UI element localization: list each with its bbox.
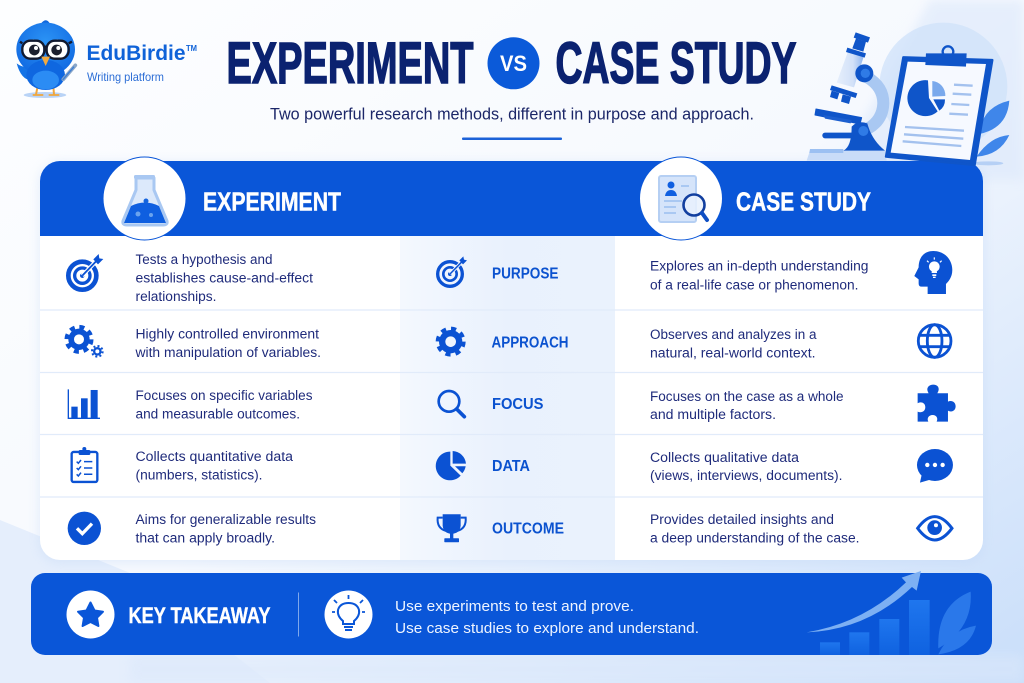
trademark: TM [186, 44, 197, 53]
icon: lightbulb badge [324, 590, 372, 638]
row: case study data [650, 449, 953, 483]
icon: head with bulb [914, 251, 952, 294]
growth chart illustration [807, 571, 976, 655]
row: experiment focus [68, 388, 313, 422]
icon: puzzle piece [918, 385, 956, 422]
illustration: microscope and clipboard [807, 23, 1009, 165]
icon: checklist clipboard [72, 447, 97, 482]
leaves [977, 101, 1009, 157]
comparison panel [38, 157, 985, 564]
row: case study approach [650, 325, 951, 360]
header label: case study: CASE STUDY [736, 186, 871, 216]
icon: star badge [66, 590, 114, 638]
icon: bird mascot [16, 20, 75, 98]
category: outcome: OUTCOME [492, 520, 564, 538]
icon: gears [67, 327, 103, 357]
row: experiment purpose: Tests a hypothesis and [136, 252, 272, 267]
row: experiment focus: and measurable outcomes. [136, 406, 300, 422]
row: experiment approach: Highly controlled environment [136, 326, 319, 342]
row: experiment data: (numbers, statistics). [136, 468, 262, 482]
key takeaway banner [31, 571, 992, 655]
icon: check circle [68, 512, 101, 545]
category: approach [438, 329, 568, 354]
header: experiment [103, 157, 341, 240]
header: case study [640, 157, 871, 240]
row: case study focus: and multiple factors. [650, 407, 776, 422]
icon: target [438, 256, 467, 286]
title: case study: CASE STUDY [556, 31, 796, 96]
row: experiment approach: with manipulation of variables. [134, 345, 321, 360]
row: experiment focus: Focuses on specific variables [136, 388, 313, 403]
column: categories [436, 256, 568, 542]
vs badge: VS [500, 51, 527, 76]
row: case study approach: Observes and analyzes in a [650, 327, 817, 342]
row: experiment purpose: relationships. [136, 289, 216, 304]
row: case study outcome: Provides detailed insights and [650, 512, 834, 527]
vs badge [488, 37, 540, 89]
row: case study focus: Focuses on the case as a whole [650, 389, 844, 404]
logo tagline: Writing platform [87, 70, 164, 84]
icon: magnifier [439, 391, 464, 417]
row: case study purpose [650, 251, 952, 294]
takeaway text: Use case studies to explore and understand. [395, 621, 699, 637]
row: case study data: Collects qualitative data [650, 450, 800, 465]
row: case study data: (views, interviews, documents). [650, 468, 842, 483]
icon: pie chart [436, 451, 466, 480]
row: experiment approach [67, 326, 321, 360]
takeaway text: Use experiments to test and prove. [395, 599, 634, 615]
header label: experiment: EXPERIMENT [203, 186, 341, 216]
icon: trophy [438, 514, 466, 542]
row: case study approach: natural, real-world context. [650, 346, 816, 360]
key takeaway label: KEY TAKEAWAY [128, 603, 271, 628]
column: experiment points [67, 252, 321, 546]
row: case study outcome: a deep understanding of the case. [650, 530, 860, 546]
case study badge: document and magnifier [640, 157, 722, 240]
icon: gear [438, 329, 463, 354]
category: data [436, 451, 530, 480]
row: experiment data [72, 447, 294, 482]
row: case study purpose: of a real-life case or phenomenon. [650, 278, 858, 292]
category: focus [439, 391, 544, 417]
icon: eye [918, 517, 952, 540]
center column background [400, 236, 615, 560]
subtitle: Two powerful research methods, different in purpose and approach. [270, 106, 754, 124]
icon: globe [918, 325, 951, 357]
table header [40, 161, 983, 236]
category: purpose [438, 256, 559, 286]
row: experiment outcome [68, 512, 316, 546]
column: case study points [650, 251, 956, 546]
icon: bar chart [68, 389, 100, 418]
row: experiment data: Collects quantitative data [136, 449, 294, 464]
category: approach: APPROACH [492, 334, 568, 352]
icon: speech bubble [917, 449, 953, 483]
category: outcome [438, 514, 564, 542]
microscope [807, 32, 887, 161]
logo: EduBirdie [16, 20, 197, 98]
clipboard [886, 46, 992, 165]
row: case study outcome [650, 512, 952, 546]
row: experiment purpose [68, 252, 313, 304]
row: case study focus [650, 385, 956, 422]
experiment badge: flask [103, 157, 186, 240]
row: experiment purpose: establishes cause-and-effect [136, 270, 313, 286]
title [226, 31, 796, 96]
row: experiment outcome: that can apply broadly. [136, 530, 275, 546]
takeaway text [395, 599, 699, 637]
category: purpose: PURPOSE [492, 266, 559, 282]
icon: target [68, 254, 103, 290]
title: experiment: EXPERIMENT [226, 31, 474, 96]
category: focus: FOCUS [492, 396, 544, 413]
row: case study purpose: Explores an in-depth understanding [650, 258, 868, 274]
logo wordmark: EduBirdie [86, 42, 186, 65]
row: experiment outcome: Aims for generalizable results [136, 512, 316, 527]
category: data: DATA [492, 458, 530, 475]
